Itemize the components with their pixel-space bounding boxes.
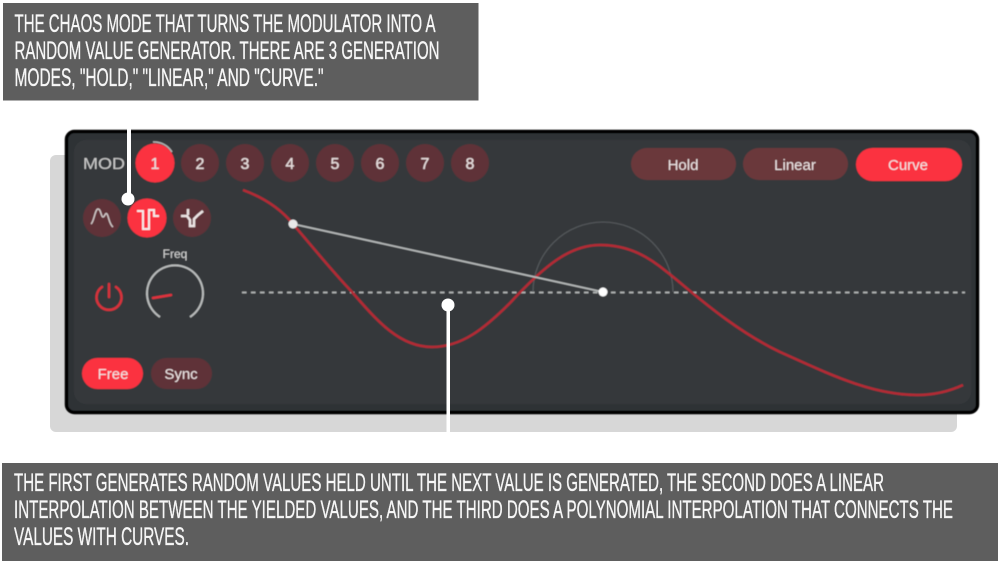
icon: power [96, 284, 122, 310]
callout: chaos mode description [3, 3, 478, 100]
mode buttons [83, 198, 211, 238]
mod selector buttons: 6 [376, 156, 385, 173]
generation mode buttons: Hold [668, 157, 698, 174]
callout: generation modes explanation: VALUES WITH CURVES. [14, 523, 189, 551]
chart: chaos waveform [242, 190, 965, 395]
free and sync buttons: Free [98, 366, 128, 383]
mod selector buttons: 3 [241, 156, 250, 173]
mod selector buttons: 2 [196, 156, 205, 173]
generation mode buttons [631, 148, 962, 181]
free and sync buttons: Sync [164, 366, 198, 383]
label: MOD: MOD [83, 156, 125, 173]
callout: chaos mode description: MODES, "HOLD," "LINEAR," AND "CURVE." [14, 64, 324, 92]
mod selector buttons [136, 142, 489, 182]
callout: generation modes explanation [2, 463, 998, 561]
mod selector buttons: 7 [421, 156, 430, 173]
mod selector buttons: 4 [286, 156, 295, 173]
frequency knob [147, 247, 203, 317]
panel: modulator interface [66, 132, 978, 412]
mod selector buttons: 5 [331, 156, 340, 173]
panel shadow [50, 155, 957, 432]
leader line: top callout [122, 100, 134, 206]
generation mode buttons: Linear [774, 157, 816, 174]
free and sync buttons [82, 358, 212, 389]
generation mode buttons: Curve [888, 157, 928, 174]
callout: chaos mode description: RANDOM VALUE GENERATOR. THERE ARE 3 GENERATION [14, 37, 440, 65]
callout: chaos mode description: THE CHAOS MODE THAT TURNS THE MODULATOR INTO A [14, 10, 436, 38]
frequency knob: Freq [163, 247, 187, 261]
mod selector buttons: 8 [466, 156, 475, 173]
mod selector buttons: 1 [151, 156, 160, 173]
leader line: bottom callout [442, 298, 454, 463]
